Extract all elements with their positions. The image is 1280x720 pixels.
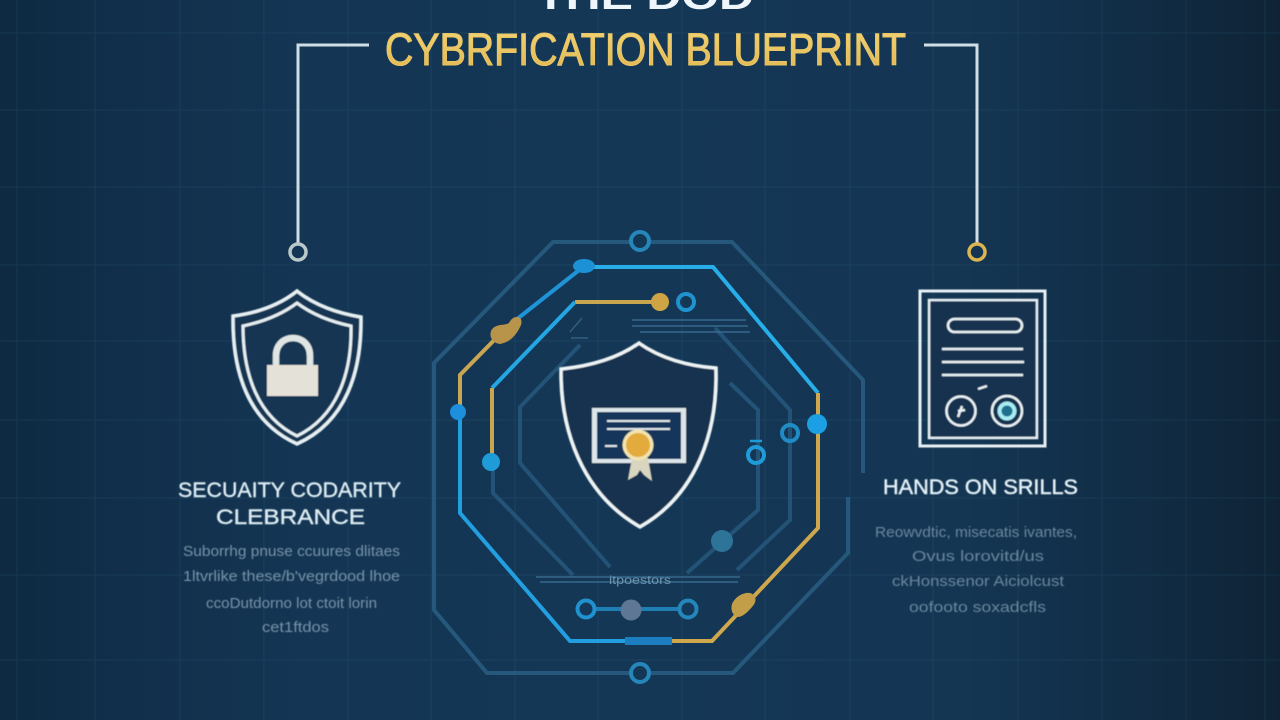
left body text: ccoDutdorno lot ctoit lorin <box>206 595 377 612</box>
right heading: hands on skills: HANDS ON SRILLS <box>883 476 1078 499</box>
title <box>385 0 906 75</box>
central circuit octagon <box>434 232 863 682</box>
padlock <box>267 338 318 396</box>
circuit micro label: itpoestors <box>609 573 671 587</box>
right body text: oofooto soxadcfls <box>909 599 1046 616</box>
seal and ribbon <box>622 430 654 481</box>
left connector with node <box>290 45 369 260</box>
left heading: security clearance <box>178 479 401 529</box>
icon: document with seals <box>920 291 1045 446</box>
faint inner traces <box>493 328 790 575</box>
left heading: security clearance: CLEBRANCE <box>216 506 365 529</box>
left body text: cet1ftdos <box>262 619 329 636</box>
right body text: Reowvdtic, misecatis ivantes, <box>875 524 1077 541</box>
bright inner ring <box>492 302 660 460</box>
right body text: Ovus lorovitd/us <box>912 548 1044 565</box>
icon: central shield with certificate <box>561 343 716 527</box>
subtitle: cybrfication blueprint: CYBRFICATION BLUEPRINT <box>385 24 906 75</box>
right body text <box>875 524 1077 616</box>
left heading: security clearance: SECUAITY CODARITY <box>178 479 401 502</box>
faint outer circuit frame <box>434 242 863 673</box>
right connector with gold node <box>924 45 985 260</box>
nodes <box>450 232 827 682</box>
bright outer ring <box>460 267 818 641</box>
certificate <box>592 408 686 481</box>
left body text <box>183 543 400 636</box>
right body text: ckHonssenor Aiciolcust <box>892 573 1065 590</box>
left body text: 1ltvrlike these/b'vegrdood lhoe <box>183 568 400 585</box>
icon: shield with padlock <box>233 291 361 444</box>
left body text: Suborrhg pnuse ccuures dlitaes <box>183 543 400 560</box>
data lines <box>536 318 750 582</box>
